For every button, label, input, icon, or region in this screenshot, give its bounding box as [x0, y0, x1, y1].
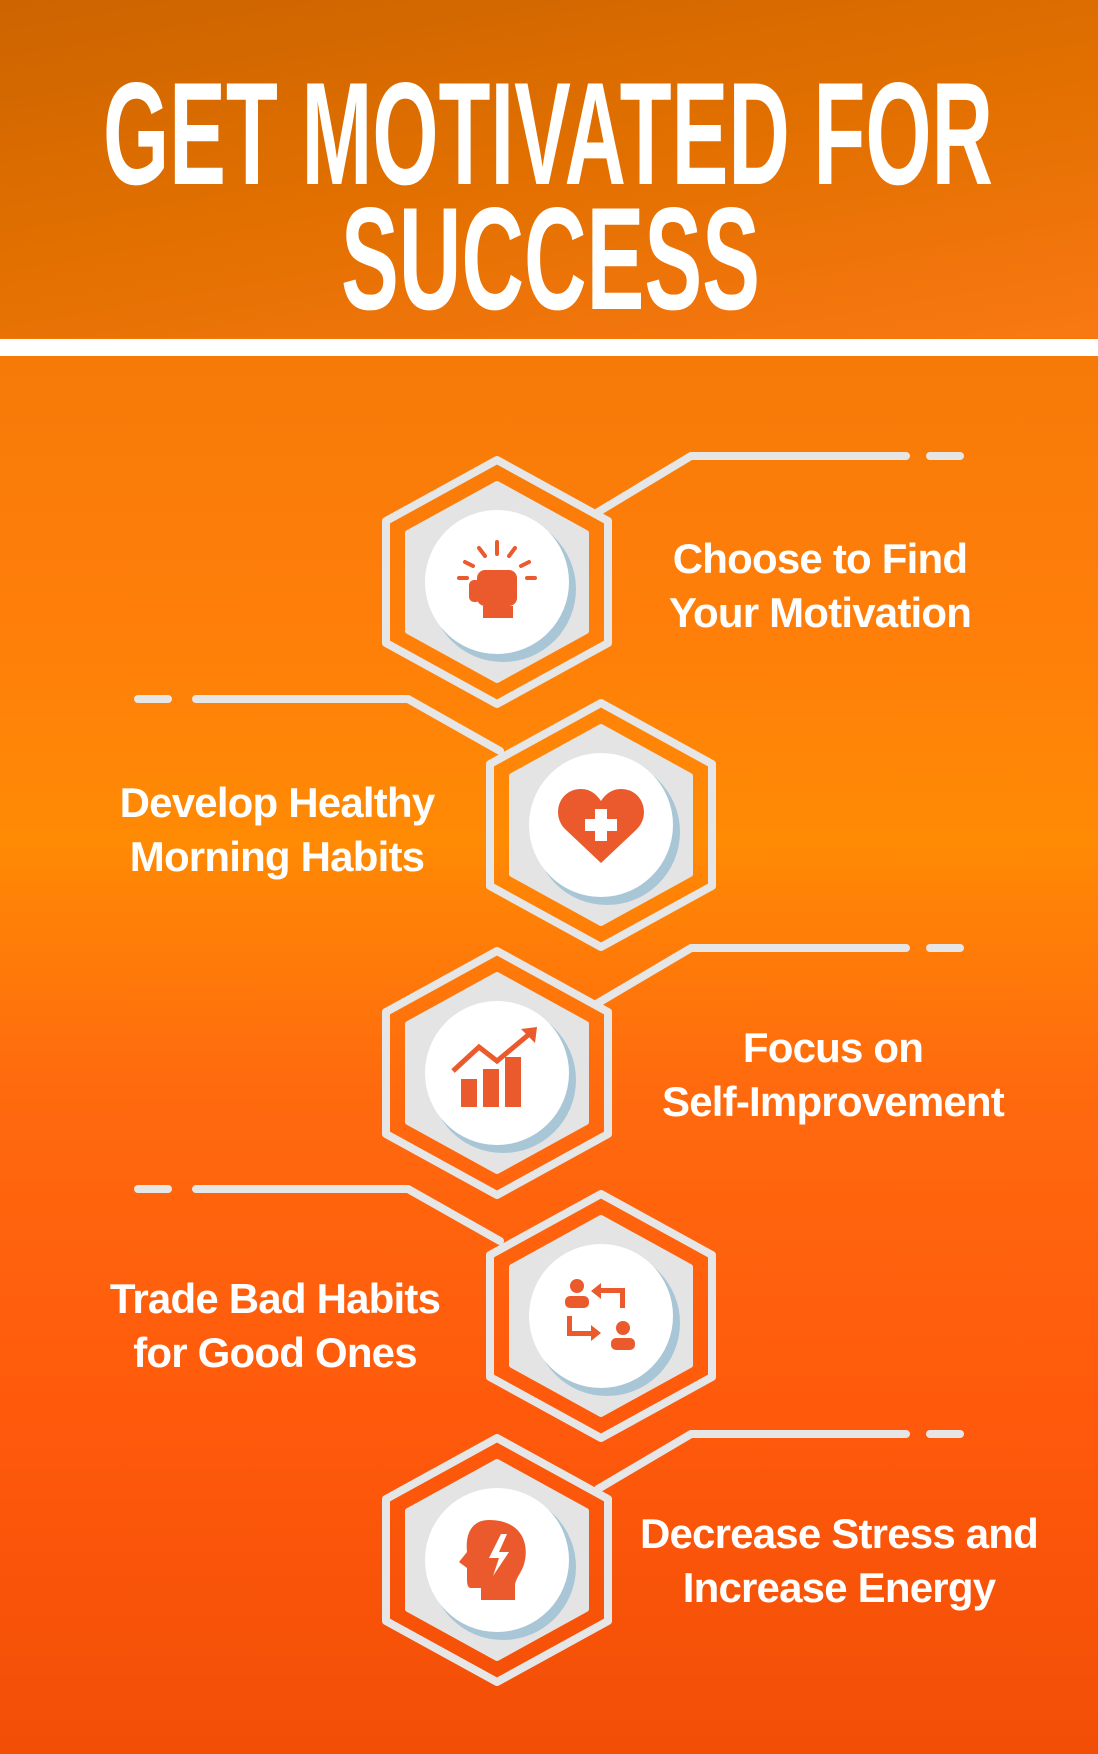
- text: step 2: Morning Habits: [130, 833, 424, 880]
- title: [103, 52, 993, 340]
- text: step 1: Choose to Find: [673, 535, 967, 582]
- text: step 5: [640, 1510, 1038, 1611]
- hexagon 2: heart icon: [490, 703, 712, 947]
- text: step 4: Trade Bad Habits: [110, 1275, 440, 1322]
- text: step 4: [110, 1275, 440, 1376]
- text: step 5: Increase Energy: [683, 1564, 995, 1611]
- text: step 3: Self-Improvement: [662, 1078, 1004, 1125]
- text: step 4: for Good Ones: [133, 1329, 417, 1376]
- header band: [0, 0, 1098, 338]
- text: step 2: Develop Healthy: [120, 779, 434, 826]
- text: step 2: [120, 779, 435, 880]
- text: step 3: Focus on: [743, 1024, 923, 1071]
- hexagon 4: swap people icon: [490, 1194, 712, 1438]
- hexagon 1: fist icon: [386, 460, 608, 704]
- hexagon 3: chart icon: [386, 951, 608, 1195]
- text: step 1: Your Motivation: [669, 589, 971, 636]
- text: step 5: Decrease Stress and: [640, 1510, 1038, 1557]
- hexagon 5: head icon: [386, 1438, 608, 1682]
- title: SUCCESS: [341, 177, 760, 340]
- text: step 1: [669, 535, 971, 636]
- text: step 3: [662, 1024, 1004, 1125]
